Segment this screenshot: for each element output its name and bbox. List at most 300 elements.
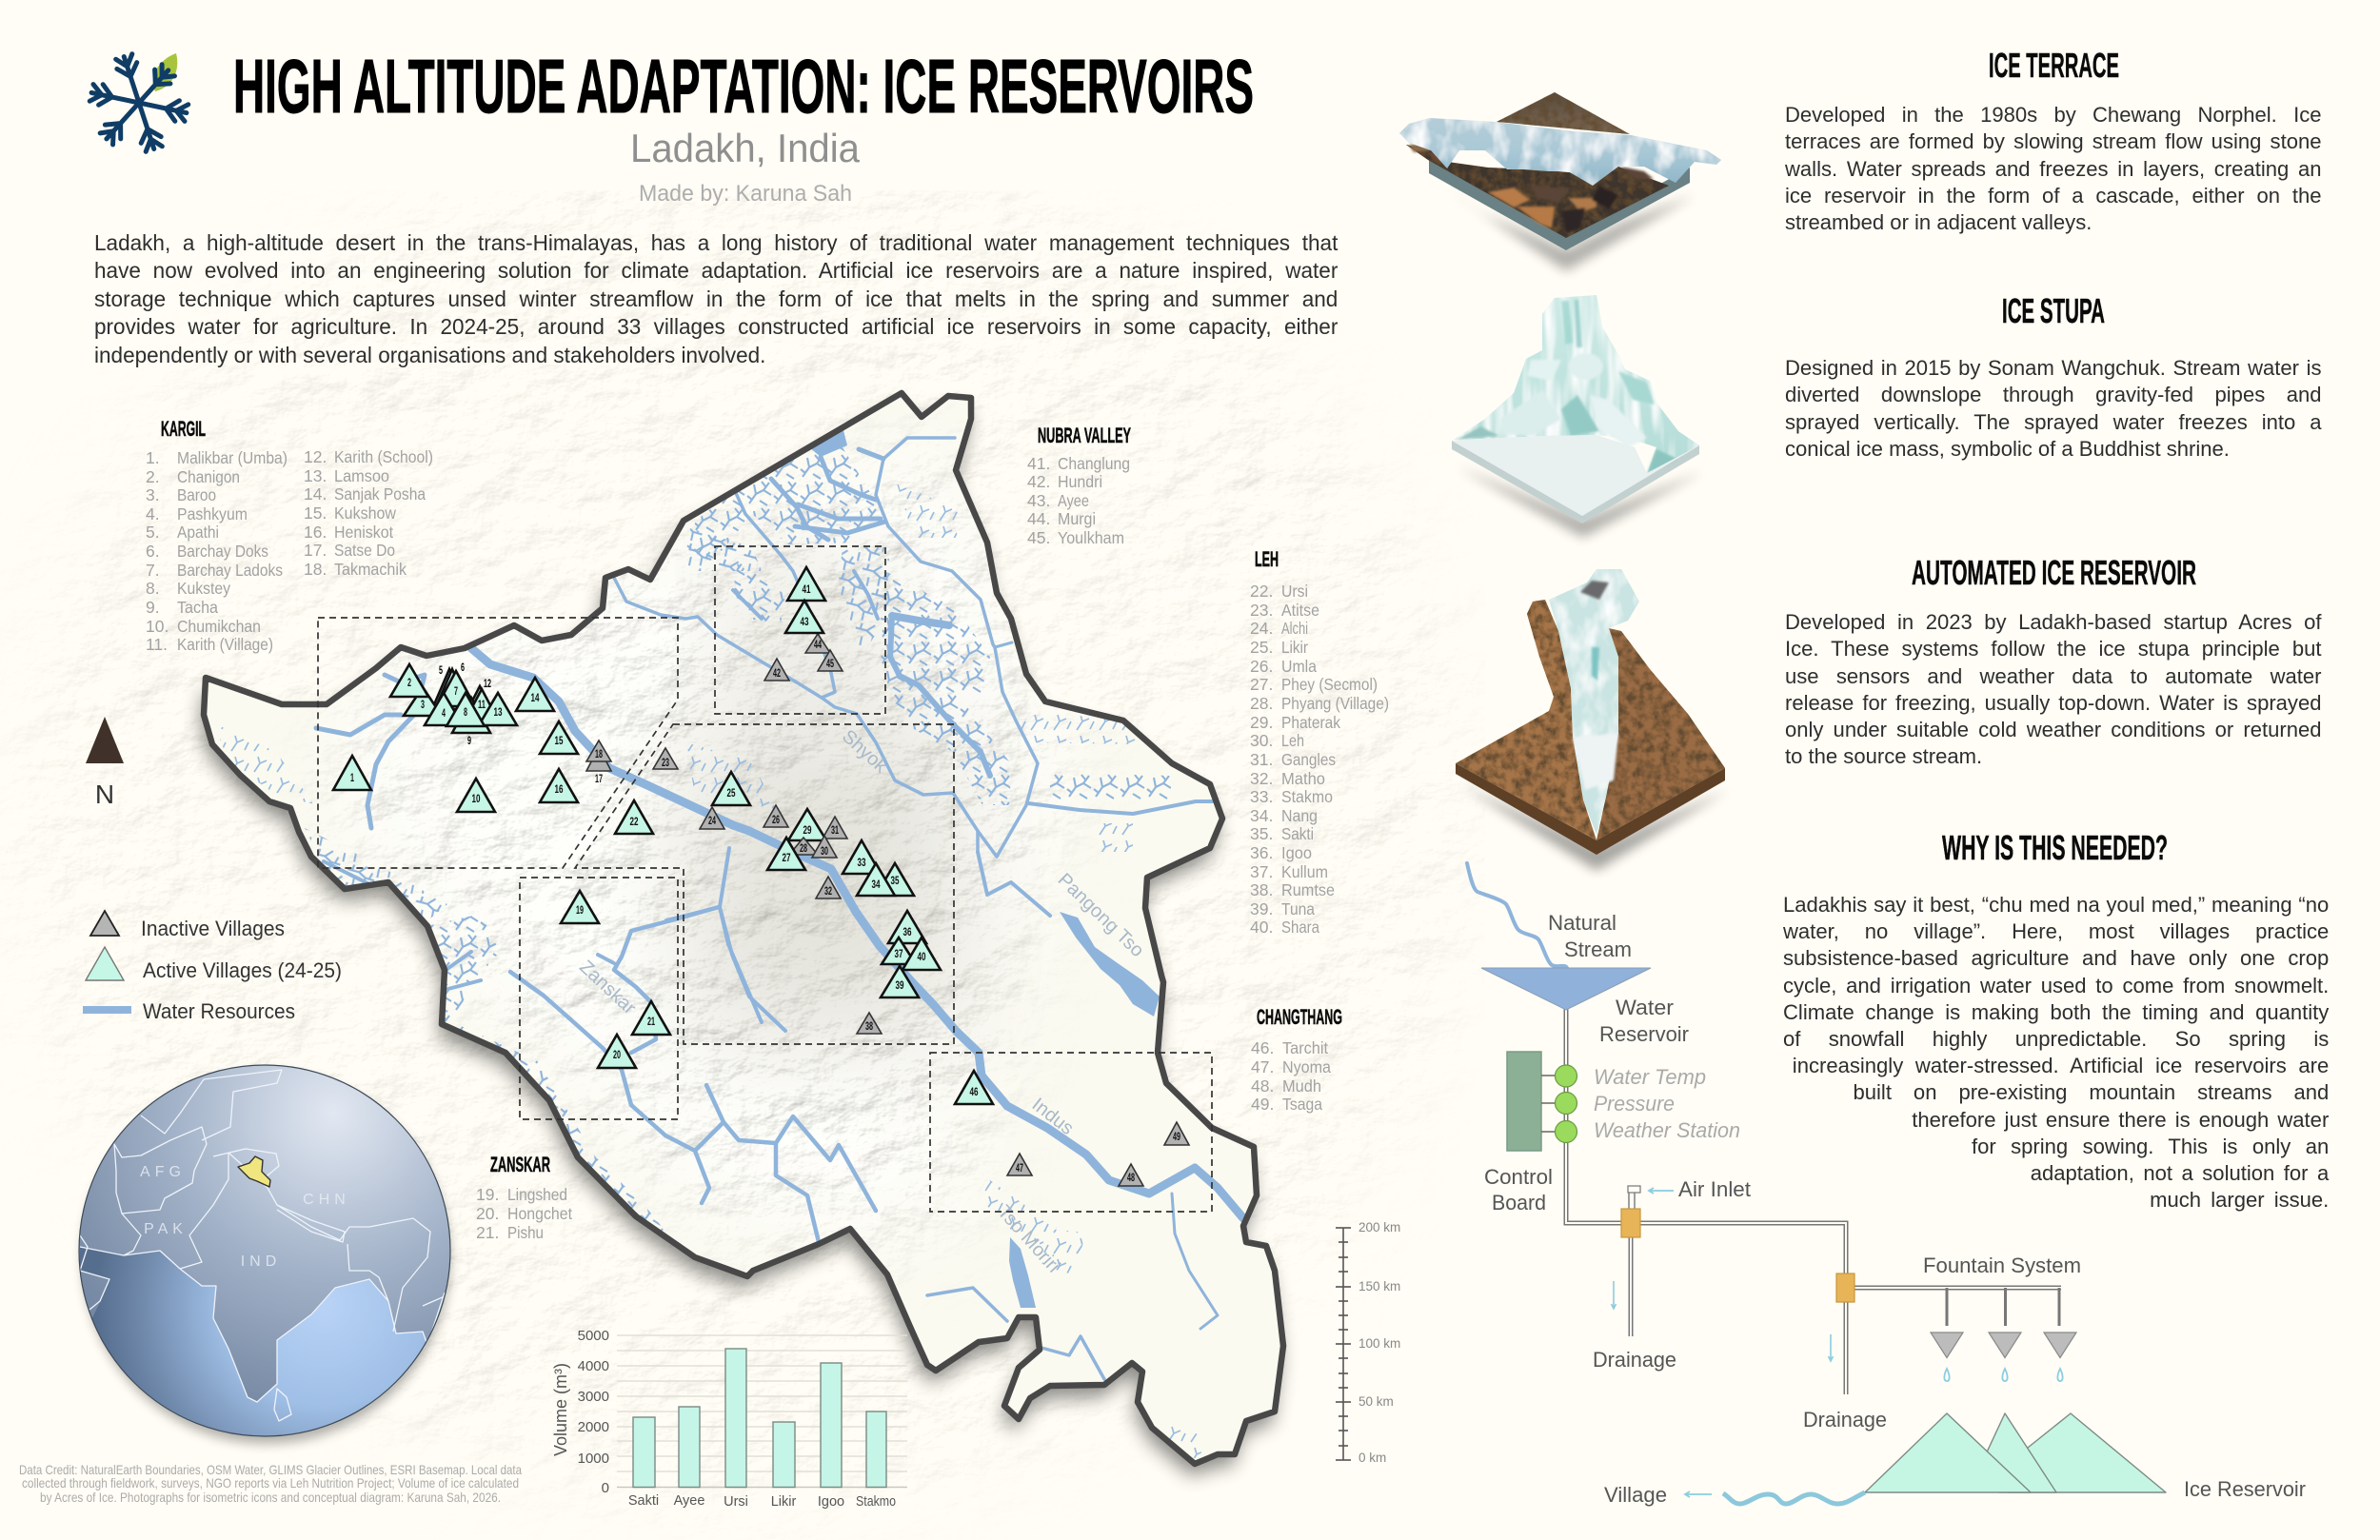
marker 16	[540, 769, 578, 802]
sensor labels: Weather Station	[1594, 1118, 1740, 1142]
water labels: Zanskar	[575, 957, 640, 1019]
data credit: collected through fieldwork, surveys, NGO reports via Leh Nutrition Project; Volume of ice calculated	[22, 1475, 519, 1491]
village list: Kargil: 13.	[304, 466, 327, 485]
text: ice terrace: streambed or in adjacent valleys.	[1785, 210, 2092, 234]
text: ice stupa: sprayed vertically. The sprayed water freezes into a	[1785, 410, 2321, 434]
label: water reservoir: Reservoir	[1599, 1022, 1689, 1046]
legend: water resources	[83, 999, 295, 1023]
marker 13	[479, 693, 517, 725]
text: why is this needed: Ladakhis say it best, “chu med na youl med,” meaning “no	[1783, 893, 2329, 917]
village list: Leh: Igoo	[1281, 843, 1312, 862]
y axis title: Volume (m³)	[551, 1363, 570, 1456]
village list: Zanskar: 21.	[476, 1223, 499, 1242]
icon: automated ice reservoir isometric	[1456, 569, 1728, 871]
map terrain	[220, 424, 1245, 1458]
x axis labels: Ayee	[674, 1493, 704, 1509]
marker 5, 6, 9, 12 number labels: 5	[439, 663, 443, 677]
village list: Leh: 28.	[1250, 694, 1273, 713]
village list: Kargil: 15.	[304, 503, 327, 523]
globe locator map	[67, 1065, 457, 1447]
marker 11: 11	[478, 698, 486, 711]
village list: Nubra Valley	[1027, 424, 1131, 547]
village list: Kargil: Pashkyum	[177, 504, 248, 523]
marker 17: 17	[595, 772, 603, 785]
marker 25: 25	[727, 786, 736, 800]
label: water reservoir: Water	[1616, 996, 1674, 1019]
village list: Kargil: 2.	[146, 467, 160, 486]
country labels: IND	[241, 1254, 281, 1270]
village list: Leh: 33.	[1250, 787, 1273, 806]
water labels: Indus	[1028, 1095, 1078, 1139]
text: why is this needed	[1783, 893, 2329, 1212]
marker 4	[425, 693, 463, 725]
x axis labels: Stakmo	[856, 1494, 896, 1510]
text: ice stupa: Designed in 2015 by Sonam Wangchuk. Stream water is	[1785, 356, 2321, 380]
marker 21: 21	[647, 1015, 655, 1028]
ice reservoir mountains	[1865, 1413, 2166, 1492]
chart gridlines	[617, 1335, 907, 1487]
intro paragraph: provides water for agriculture. In 2024-25, around 33 villages constructed artificial ice reservoirs in some capacity, either	[94, 314, 1338, 339]
intro paragraph: independently or with several organisations and stakeholders involved.	[94, 343, 765, 367]
village list: Nubra Valley: 44.	[1027, 509, 1050, 528]
legend: inactive villages: Inactive Villages	[141, 917, 285, 940]
background hillshade	[0, 190, 1485, 1540]
marker 41: 41	[802, 582, 811, 596]
village list: Leh: Phey (Secmol)	[1281, 675, 1378, 694]
village list: Nubra Valley: 43.	[1027, 491, 1050, 510]
map of Ladakh	[190, 381, 1295, 1475]
village list: Kargil: Heniskot	[334, 523, 393, 542]
village list: Leh: 27.	[1250, 675, 1273, 694]
marker 8	[446, 693, 485, 726]
village list: Kargil: 8.	[146, 579, 160, 598]
marker 34: 34	[872, 878, 881, 891]
water drops	[1944, 1369, 2063, 1381]
village list: Nubra Valley: Murgi	[1058, 509, 1096, 528]
main pipe	[1566, 1009, 1846, 1394]
sensor labels: Water Temp	[1594, 1065, 1706, 1089]
village list: Kargil: 9.	[146, 598, 160, 617]
village list: Nubra Valley: 45.	[1027, 528, 1050, 547]
inset box: Nubra Valley	[715, 546, 885, 714]
drainage arrow 2	[1828, 1334, 1834, 1361]
text: why is this needed: adaptation, not a solution for a	[2031, 1161, 2329, 1185]
village list: Nubra Valley: 41.	[1027, 454, 1050, 473]
intro paragraph: have now evolved into an engineering solution for climate adaptation. Artificial ice reservoirs are a nature inspired, water	[94, 258, 1338, 283]
marker 2: 2	[407, 676, 411, 689]
village list: Leh: 25.	[1250, 638, 1273, 657]
glaciers	[214, 430, 1204, 1461]
legend: water resources: Water Resources	[143, 999, 295, 1023]
marker 3: 3	[421, 698, 425, 711]
y axis labels: 0	[602, 1480, 609, 1496]
village list: Leh: 29.	[1250, 713, 1273, 732]
country labels: AFG	[140, 1164, 186, 1180]
village list: Leh: 30.	[1250, 731, 1273, 750]
village list: Zanskar	[476, 1153, 572, 1242]
map border	[204, 393, 1283, 1464]
north arrow	[86, 717, 124, 809]
bar chart: ice volume	[551, 1328, 907, 1510]
marker 9	[452, 698, 490, 733]
text: why is this needed: of snowfall highly unpredictable. So spring is	[1783, 1027, 2329, 1051]
marker 16: 16	[554, 782, 564, 796]
village list: Leh: 36.	[1250, 843, 1273, 862]
village list: Kargil: Barchay Doks	[177, 542, 268, 561]
x axis labels: Ursi	[724, 1494, 748, 1510]
marker 15: 15	[554, 734, 564, 747]
conceptual diagram	[1467, 863, 2306, 1507]
village list: Kargil: Chanigon	[177, 467, 240, 486]
village list: Leh: 34.	[1250, 806, 1273, 825]
village list: Leh: Gangles	[1281, 750, 1336, 769]
inset box: Leh	[575, 724, 954, 1044]
marker 19: 19	[576, 903, 584, 917]
label: natural stream	[1548, 911, 1632, 961]
text: automated ice reservoir: use sensors and weather data to automate water	[1785, 664, 2321, 688]
heading: Kargil: KARGIL	[161, 417, 206, 441]
control board	[1507, 1052, 1566, 1151]
village list: Kargil: 1.	[146, 448, 160, 467]
water labels: Tso Moriri	[993, 1201, 1064, 1277]
valve 1	[1621, 1209, 1640, 1237]
y axis labels: 4000	[578, 1358, 609, 1374]
village list: Kargil: 16.	[304, 523, 327, 542]
marker 5, 6, 9, 12 number labels: 12	[484, 677, 491, 690]
natural stream	[1467, 863, 1567, 968]
village list: Kargil: 6.	[146, 542, 160, 561]
text: ice terrace: ice reservoir in the form of a cascade, either on the	[1785, 184, 2321, 207]
scale bar: 100 km	[1359, 1336, 1400, 1351]
marker 33: 33	[857, 856, 866, 869]
text: automated ice reservoir: to the source stream.	[1785, 744, 1982, 768]
village list: Changthang: 47.	[1251, 1057, 1274, 1076]
label: control board: Control	[1484, 1165, 1553, 1189]
village list: Zanskar: Hongchet	[507, 1204, 572, 1223]
fountain pipes	[1854, 1288, 2061, 1326]
text: automated ice reservoir: Ice. These systems follow the ice stupa principle but	[1785, 637, 2321, 661]
marker 38: 38	[865, 1019, 873, 1033]
village list: Kargil: 12.	[304, 447, 327, 466]
text: why is this needed: built on pre-existing mountain streams and	[1853, 1080, 2329, 1104]
village list: Kargil: 4.	[146, 504, 160, 523]
glacier trunks	[324, 457, 990, 990]
marker 20	[598, 1035, 636, 1068]
village list: Nubra Valley: 42.	[1027, 472, 1050, 491]
village list: Leh	[1250, 547, 1389, 937]
marker 27	[767, 838, 805, 870]
village list: Leh: Nang	[1281, 806, 1318, 825]
text: why is this needed: Climate change is making both the timing and quantity	[1783, 1000, 2329, 1024]
scale bar: 150 km	[1359, 1279, 1400, 1293]
village list: Kargil: Karith (School)	[334, 447, 433, 466]
text: why is this needed: subsistence-based agriculture and have only one crop	[1783, 946, 2329, 970]
legend: active villages	[86, 947, 342, 982]
air inlet: Air Inlet	[1678, 1177, 1751, 1201]
village list: Leh: Leh	[1281, 731, 1304, 750]
village list: Kargil: 3.	[146, 485, 160, 504]
air inlet	[1628, 1177, 1751, 1209]
label: ice reservoir: Ice Reservoir	[2184, 1477, 2306, 1501]
village list: Zanskar: 20.	[476, 1204, 499, 1223]
sensor labels: Pressure	[1594, 1092, 1675, 1116]
marker 48: 48	[1127, 1171, 1135, 1184]
marker 29	[788, 809, 826, 840]
village list: Leh: 40.	[1250, 918, 1273, 937]
marker 6	[435, 669, 469, 709]
text: ice stupa: conical ice mass, symbolic of a Buddhist shrine.	[1785, 437, 2230, 461]
text: why is this needed: much larger issue.	[2150, 1188, 2329, 1212]
label: control board: Board	[1492, 1191, 1546, 1214]
village list: Zanskar: Pishu	[507, 1223, 544, 1242]
village list: Leh: Matho	[1281, 769, 1325, 788]
x axis labels: Sakti	[628, 1493, 659, 1509]
marker 3	[404, 687, 442, 716]
marker 10	[457, 779, 495, 812]
marker 12	[463, 686, 497, 720]
marker 46: 46	[969, 1085, 979, 1098]
village list: Leh: Kullum	[1281, 862, 1328, 881]
water labels: Pangong Tso	[1054, 869, 1148, 961]
label: natural stream: Stream	[1564, 938, 1632, 961]
y axis labels: 2000	[578, 1419, 609, 1435]
marker 42: 42	[773, 666, 781, 680]
heading: Changthang: CHANGTHANG	[1257, 1005, 1342, 1029]
marker 40	[902, 938, 941, 970]
village list: Changthang: Nyoma	[1282, 1057, 1331, 1076]
text: why is this needed: for spring sowing. This is only an	[1972, 1135, 2329, 1158]
marker 22	[615, 800, 653, 834]
marker 11	[466, 689, 498, 720]
marker 21	[632, 1001, 670, 1035]
village list: Kargil: Kukshow	[334, 503, 396, 523]
legend: active villages: Active Villages (24-25)	[143, 958, 342, 982]
marker 42	[764, 659, 789, 681]
data credit: by Acres of Ice. Photographs for isometric icons and conceptual diagram: Karuna Sah, 2026.	[40, 1490, 501, 1505]
intro paragraph: storage technique which captures unsed winter streamflow in the form of ice that melts in the spring and summer and	[94, 286, 1338, 311]
village list: Leh: Phyang (Village)	[1281, 694, 1389, 713]
x axis labels	[628, 1493, 896, 1510]
marker 4: 4	[442, 706, 446, 720]
scale bar: 0 km	[1359, 1451, 1386, 1465]
marker 49: 49	[1173, 1130, 1180, 1143]
marker 32: 32	[824, 884, 832, 898]
marker 32	[816, 877, 841, 898]
inset box: Zanskar	[520, 878, 678, 1119]
village list: Kargil: Apathi	[177, 523, 219, 542]
marker 36: 36	[902, 925, 912, 938]
marker 37	[882, 938, 916, 964]
marker 26	[764, 805, 788, 827]
village list: Kargil	[146, 417, 433, 654]
marker 27: 27	[783, 851, 791, 864]
marker 33	[843, 840, 881, 874]
village list: Changthang: 49.	[1251, 1095, 1274, 1114]
village list: Leh: Phaterak	[1281, 713, 1340, 732]
author line: Made by: Karuna Sah	[639, 181, 852, 207]
marker 5	[432, 669, 466, 709]
marker 41	[787, 567, 825, 601]
title: HIGH ALTITUDE ADAPTATION: ICE RESERVOIRS	[233, 44, 1254, 128]
marker 20: 20	[613, 1048, 621, 1061]
village list: Leh: 38.	[1250, 880, 1273, 899]
water labels	[575, 726, 1148, 1277]
marker 44: 44	[814, 638, 822, 651]
scale bar	[1336, 1220, 1400, 1465]
text: ice terrace	[1785, 103, 2321, 234]
marker 47	[1007, 1154, 1032, 1175]
lake: Tso Moriri	[1009, 1237, 1036, 1308]
water labels: Shyok	[838, 726, 892, 778]
label: village: Village	[1604, 1483, 1667, 1507]
sensor labels	[1594, 1065, 1740, 1142]
heading: why is this needed: WHY IS THIS NEEDED?	[1942, 828, 2168, 867]
marker 22: 22	[630, 815, 639, 828]
bars	[633, 1349, 886, 1487]
marker 18	[586, 740, 611, 761]
scale bar: 200 km	[1359, 1220, 1400, 1234]
Sri Lanka	[274, 1389, 291, 1421]
text: ice terrace: terraces are formed by slowing stream flow using stone	[1785, 129, 2321, 153]
village list: Leh: 31.	[1250, 750, 1273, 769]
village list: Leh: Atitse	[1281, 601, 1319, 620]
village list: Leh: Alchi	[1281, 619, 1308, 638]
village list: Changthang	[1251, 1005, 1342, 1114]
y axis labels: 1000	[578, 1451, 609, 1467]
heading: ice stupa: ICE STUPA	[2002, 291, 2105, 330]
marker 30: 30	[821, 844, 828, 858]
village list: Leh: 23.	[1250, 601, 1273, 620]
marker 5, 6, 9, 12 number labels: 9	[467, 734, 471, 747]
subtitle: Ladakh, India	[630, 126, 861, 170]
outflow stream	[1723, 1492, 1865, 1504]
village list: Kargil: 10.	[146, 617, 169, 636]
ocean	[80, 1247, 444, 1435]
village list: Kargil: 5.	[146, 523, 160, 542]
marker 30	[812, 836, 837, 858]
sensors	[1556, 1065, 1577, 1142]
drainage arrow 1	[1611, 1281, 1616, 1309]
marker 10: 10	[472, 792, 481, 805]
text: automated ice reservoir: Developed in 2023 by Ladakh-based startup Acres of	[1785, 610, 2321, 634]
marker 29: 29	[803, 823, 812, 837]
data credit	[19, 1462, 522, 1505]
marker 46	[955, 1071, 993, 1104]
text: automated ice reservoir	[1785, 610, 2322, 768]
marker 45: 45	[826, 657, 834, 670]
map land fill	[204, 393, 1283, 1464]
village list: Leh: 22.	[1250, 582, 1273, 601]
village list: Kargil: Takmachik	[334, 560, 407, 579]
label: drainage 2: Drainage	[1803, 1408, 1887, 1431]
marker 43	[785, 601, 823, 633]
village list: Leh: Rumtse	[1281, 880, 1335, 899]
village list: Kargil: Satse Do	[334, 541, 395, 560]
marker 49	[1164, 1122, 1189, 1145]
marker 36	[888, 911, 926, 943]
marker 13: 13	[493, 705, 503, 719]
y axis labels: 5000	[578, 1328, 609, 1344]
text: why is this needed: increasingly water-stressed. Artificial ice reservoirs are	[1793, 1054, 2329, 1077]
marker 37: 37	[895, 947, 903, 960]
text: automated ice reservoir: release for freezing, usually top-down. Water is sprayed	[1785, 691, 2321, 715]
rivers	[316, 438, 1243, 1379]
marker 35	[876, 863, 914, 896]
marker 24: 24	[708, 814, 716, 827]
village list: Kargil: Chumikchan	[177, 617, 261, 636]
label: natural stream: Natural	[1548, 911, 1616, 935]
country labels: PAK	[144, 1221, 188, 1237]
intro paragraph: Ladakh, a high-altitude desert in the trans-Himalayas, has a long history of traditional water management techniques that	[94, 230, 1338, 255]
drain pipe 1	[1628, 1237, 1634, 1336]
marker 15	[540, 721, 578, 754]
heading: Nubra Valley: NUBRA VALLEY	[1038, 424, 1131, 447]
marker 48	[1119, 1164, 1143, 1186]
country labels	[140, 1164, 350, 1270]
marker 23: 23	[662, 756, 669, 769]
label: drainage 1: Drainage	[1593, 1348, 1676, 1372]
marker 24	[700, 807, 724, 829]
village list: Changthang: Mudh	[1282, 1076, 1321, 1096]
village markers	[333, 567, 1189, 1186]
village list: Kargil: 14.	[304, 484, 327, 503]
north arrow: N	[95, 780, 114, 809]
text: why is this needed: water, no village”. Here, most villages practice	[1783, 919, 2329, 943]
village list: Leh: Stakmo	[1281, 787, 1333, 806]
village list: Kargil: Kukstey	[177, 579, 230, 598]
label: fountain system: Fountain System	[1923, 1254, 2081, 1277]
village list: Kargil: 17.	[304, 541, 327, 560]
village list: Leh: 35.	[1250, 824, 1273, 843]
marker 28: 28	[800, 841, 807, 855]
marker 44	[805, 634, 830, 653]
marker 26: 26	[772, 813, 780, 826]
marker 17	[586, 747, 611, 785]
village list: Kargil: 7.	[146, 561, 160, 580]
marker 40: 40	[918, 950, 926, 963]
marker 31	[823, 817, 847, 839]
village list: Kargil: Lamsoo	[334, 466, 389, 485]
village list: Leh: Umla	[1281, 657, 1317, 676]
marker 45	[818, 650, 843, 671]
village list: Leh: 26.	[1250, 657, 1273, 676]
marker 38	[857, 1013, 882, 1034]
village list: Leh: 32.	[1250, 769, 1273, 788]
text: ice stupa	[1785, 356, 2321, 461]
marker 31: 31	[831, 823, 839, 837]
village list: Kargil: Karith (Village)	[177, 635, 273, 654]
valve 2	[1836, 1273, 1854, 1302]
x axis labels: Likir	[771, 1494, 796, 1510]
marker 19	[561, 891, 599, 923]
village list: Leh: Ursi	[1281, 582, 1308, 601]
village list: Changthang: 48.	[1251, 1076, 1274, 1096]
marker 7: 7	[454, 684, 458, 698]
marker 43: 43	[800, 615, 809, 628]
text: why is this needed: therefore just ensure there is enough water	[1912, 1108, 2329, 1132]
text: automated ice reservoir: only under suitable cold weather conditions or returned	[1785, 718, 2321, 741]
village list: Kargil: Baroo	[177, 485, 216, 504]
village list: Kargil: Sanjak Posha	[334, 484, 426, 503]
village list: Kargil: Malikbar (Umba)	[177, 448, 288, 467]
text: ice stupa: diverted downslope through gravity-fed pipes and	[1785, 383, 2321, 406]
marker 5, 6, 9, 12 number labels	[439, 661, 491, 747]
marker 34	[857, 863, 895, 896]
icon: ice terrace isometric	[1399, 92, 1721, 271]
intro paragraph	[94, 230, 1339, 367]
heading: ice terrace: ICE TERRACE	[1989, 46, 2119, 85]
inset box: Changthang	[930, 1053, 1212, 1212]
